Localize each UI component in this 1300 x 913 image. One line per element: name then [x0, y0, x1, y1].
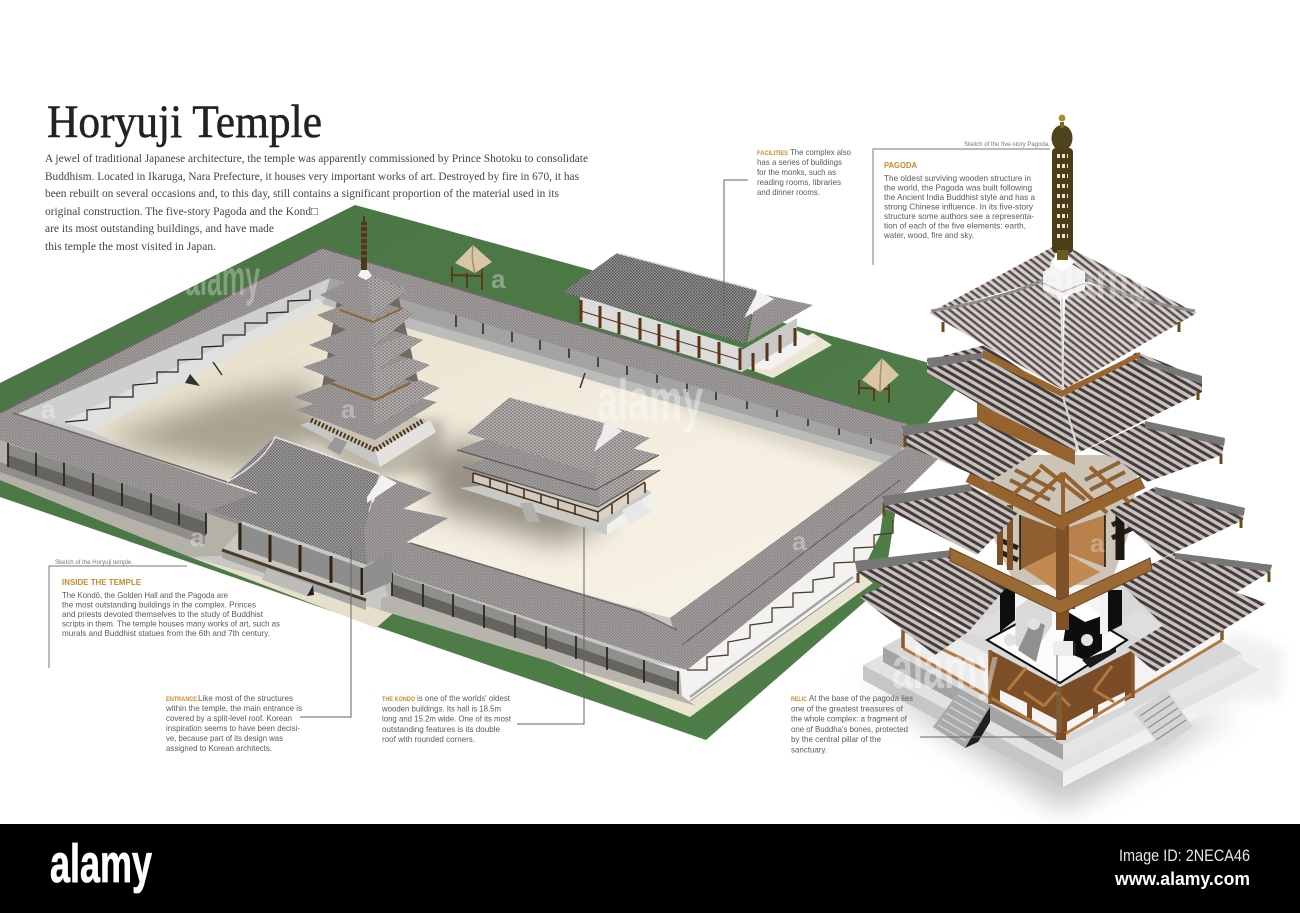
panel: pagoda — [873, 141, 1050, 265]
fifth roof — [855, 550, 1272, 632]
first storey wood band — [983, 350, 1140, 397]
callout: entrance: covered by a split-level roof. Korean — [166, 714, 292, 723]
entrance wall — [238, 523, 363, 592]
cloister south-west wing, left part — [0, 413, 260, 557]
small pagoda ground storey — [310, 405, 425, 452]
facilities roof — [563, 253, 757, 343]
main entrance gate — [210, 437, 448, 610]
kondo stairs — [520, 503, 540, 522]
roof crown block — [1043, 252, 1085, 297]
stock watermarks — [41, 250, 1150, 701]
panel: pagoda: water, wood, fire and sky. — [883, 231, 974, 240]
small pagoda roofs — [296, 385, 437, 440]
top roof — [929, 243, 1197, 390]
intro text: this temple the most visited in Japan. — [45, 239, 216, 253]
stock watermarks: a — [341, 394, 356, 424]
pagoda stairs — [933, 690, 1193, 748]
cloister north-east wing — [318, 248, 945, 467]
facilities walls — [580, 296, 742, 372]
panel: pagoda: the world, the Pagoda was built following — [884, 184, 1032, 192]
callout: facilities: FACILITIES — [757, 151, 788, 157]
intro text: been rebuilt on several occasions and, to this day, still contains a significant proportion of the material used in its — [45, 186, 559, 200]
callout: entrance: inspiration seems to have been decisi- — [166, 724, 300, 733]
pagoda upper plinth — [883, 550, 1242, 760]
small pagoda spire — [358, 216, 372, 280]
kondo plinth — [460, 470, 660, 535]
panel: inside the temple: The Kondō, the Golden Hall and the Pagoda are — [62, 591, 228, 600]
callout: entrance: ve, because part of its design was — [166, 734, 283, 743]
pagoda ground shadow — [860, 630, 1285, 810]
intro text: A jewel of traditional Japanese architecture, the temple was apparently commissioned by Prince Shotoku to consolidate — [45, 151, 588, 165]
panel: inside the temple: murals and Buddhist statues from the 6th and 7th century. — [62, 629, 270, 638]
stock watermarks: a — [792, 526, 807, 556]
kondo upper roof — [467, 397, 604, 473]
callout: the kondo: wooden buildings. Its hall is 18.5m — [381, 704, 501, 713]
callout: the kondo — [381, 694, 512, 744]
facilities building — [563, 253, 832, 378]
facilities plinth — [740, 333, 832, 378]
kondo walls — [473, 473, 598, 522]
fourth roof — [882, 484, 1245, 558]
big pagoda cutaway — [855, 115, 1285, 810]
callout: entrance: within the temple, the main entrance is — [165, 704, 302, 713]
callout: the kondo: THE KONDO — [382, 697, 415, 703]
callout: facilities: The complex also — [790, 148, 851, 157]
small pagoda stairs — [327, 437, 347, 455]
bell tower, north — [452, 245, 492, 290]
pagoda lower plinth — [863, 560, 1260, 787]
pagoda spire — [1052, 115, 1073, 260]
stock watermarks: a — [41, 394, 56, 424]
courtyard shadows — [100, 350, 900, 545]
callout leader lines — [300, 180, 1057, 737]
pagoda interior sanctuary — [963, 570, 1167, 737]
gravel pavement — [175, 520, 873, 717]
panel: inside the temple: scripts in them. The temple houses many works of art, such as — [62, 620, 280, 628]
panel: pagoda: the Ancient India Buddhist style and has a — [884, 193, 1035, 202]
panel: pagoda: tion of each of the five elements: earth, — [884, 222, 1026, 230]
entrance upper roof — [227, 437, 379, 530]
second storey wood band — [977, 403, 1075, 465]
upper interior wood chamber — [985, 455, 1140, 630]
footer image id: Image ID: 2NECA46 — [1119, 846, 1250, 865]
gallery railing — [950, 548, 1152, 614]
panel: pagoda: PAGODA — [884, 160, 917, 170]
callout: relic: the whole complex: a fragment of — [791, 715, 908, 724]
panel: inside the temple: and priests devoted themselves to the study of Buddhist — [62, 610, 264, 619]
title: Horyuji Temple — [47, 96, 322, 148]
stock watermarks: a — [190, 522, 205, 552]
stock watermarks: alamy — [185, 250, 260, 306]
footer website: www.alamy.com — [1114, 869, 1250, 889]
entrance floor and plinth — [222, 525, 388, 603]
third roof — [902, 417, 1225, 482]
stock watermarks: a — [941, 396, 956, 426]
callout: facilities: for the monks, such as — [757, 168, 836, 177]
callout: the kondo: long and 15.2m wide. One of its most — [382, 715, 512, 724]
courtyard sand — [93, 300, 900, 618]
callout: facilities: reading rooms, libraries — [757, 178, 841, 187]
callout: facilities: has a series of buildings — [757, 158, 842, 167]
callout: entrance: ENTRANCE — [166, 697, 197, 703]
callout: facilities — [757, 148, 851, 197]
Kondo golden hall — [457, 397, 660, 535]
intro text: are its most outstanding buildings, and have made — [45, 221, 274, 235]
panel: pagoda: strong Chinese influence. In its five-story — [884, 202, 1034, 212]
callout: relic: sanctuary. — [791, 746, 827, 754]
stock watermarks: a — [1090, 528, 1105, 558]
white wall panels — [1000, 690, 1027, 717]
callout: entrance: assigned to Korean architects. — [166, 744, 272, 753]
panel: pagoda: The oldest surviving wooden structure in — [884, 174, 1031, 183]
entrance stairs — [262, 568, 313, 596]
cloister north-west wing — [0, 248, 330, 432]
second roof — [927, 345, 1202, 452]
stock watermarks: a — [491, 264, 506, 294]
callout: the kondo: is one of the worlds' oldest — [417, 694, 511, 703]
intro text: Buddhism. Located in Ikaruga, Nara Prefecture, it houses very important works of art. Destroyed by fire in 670, it has — [45, 169, 579, 183]
callout: entrance: Like most of the structures — [198, 694, 293, 703]
callout: the kondo: roof with rounded corners. — [382, 735, 475, 744]
cloister south-west wing, right part — [372, 534, 696, 706]
callout: relic: At the base of the pagoda lies — [809, 694, 913, 703]
panel: inside the temple: INSIDE THE TEMPLE — [62, 577, 141, 587]
callout: relic: one of the greatest treasures of — [791, 704, 904, 713]
intro text: original construction. The five-story Pagoda and the Kond□ — [45, 204, 318, 218]
kondo lower roof — [463, 445, 660, 507]
callout: relic: RELIC — [791, 697, 808, 703]
panel: inside the temple: the most outstanding buildings in the complex. Princes — [62, 600, 256, 610]
callout: facilities: and dinner rooms. — [757, 188, 820, 197]
pagoda ground storey walls — [903, 604, 1222, 740]
callout: relic — [791, 694, 913, 754]
panel: inside the temple: Sketch of the Horyuji temple. — [55, 559, 133, 566]
kondo middle roof — [457, 425, 659, 490]
callout: relic: one of Buddha's bones, protected — [791, 725, 908, 734]
small pagoda core — [318, 295, 425, 410]
callout: the kondo: outstanding features is its double — [382, 725, 500, 734]
panel: pagoda: Sketch of the five-story Pagoda. — [964, 141, 1050, 148]
footer logo: alamy — [50, 834, 152, 894]
panel: pagoda: structure some authors see a representa- — [884, 212, 1034, 221]
footer bar — [0, 824, 1300, 913]
bell tower, east — [859, 358, 899, 403]
stock watermarks: alamy — [1043, 252, 1150, 310]
intro text — [45, 151, 588, 253]
callout: relic: by the central pillar of the — [791, 735, 881, 744]
courtyard small pagoda — [294, 216, 440, 467]
stock watermarks: alamy — [892, 636, 998, 701]
pagoda skirt roofs — [860, 585, 1267, 672]
cloister underlay — [0, 248, 945, 700]
callout: entrance — [165, 694, 302, 753]
entrance lower roof — [210, 485, 448, 565]
cloister south-east wing — [640, 448, 945, 702]
grass ground — [0, 205, 955, 740]
temple complex illustration — [0, 205, 955, 740]
small pagoda plinth — [300, 405, 436, 467]
panel: inside the temple — [49, 559, 280, 668]
stock watermarks: alamy — [597, 368, 703, 433]
timber truss — [968, 465, 1143, 530]
